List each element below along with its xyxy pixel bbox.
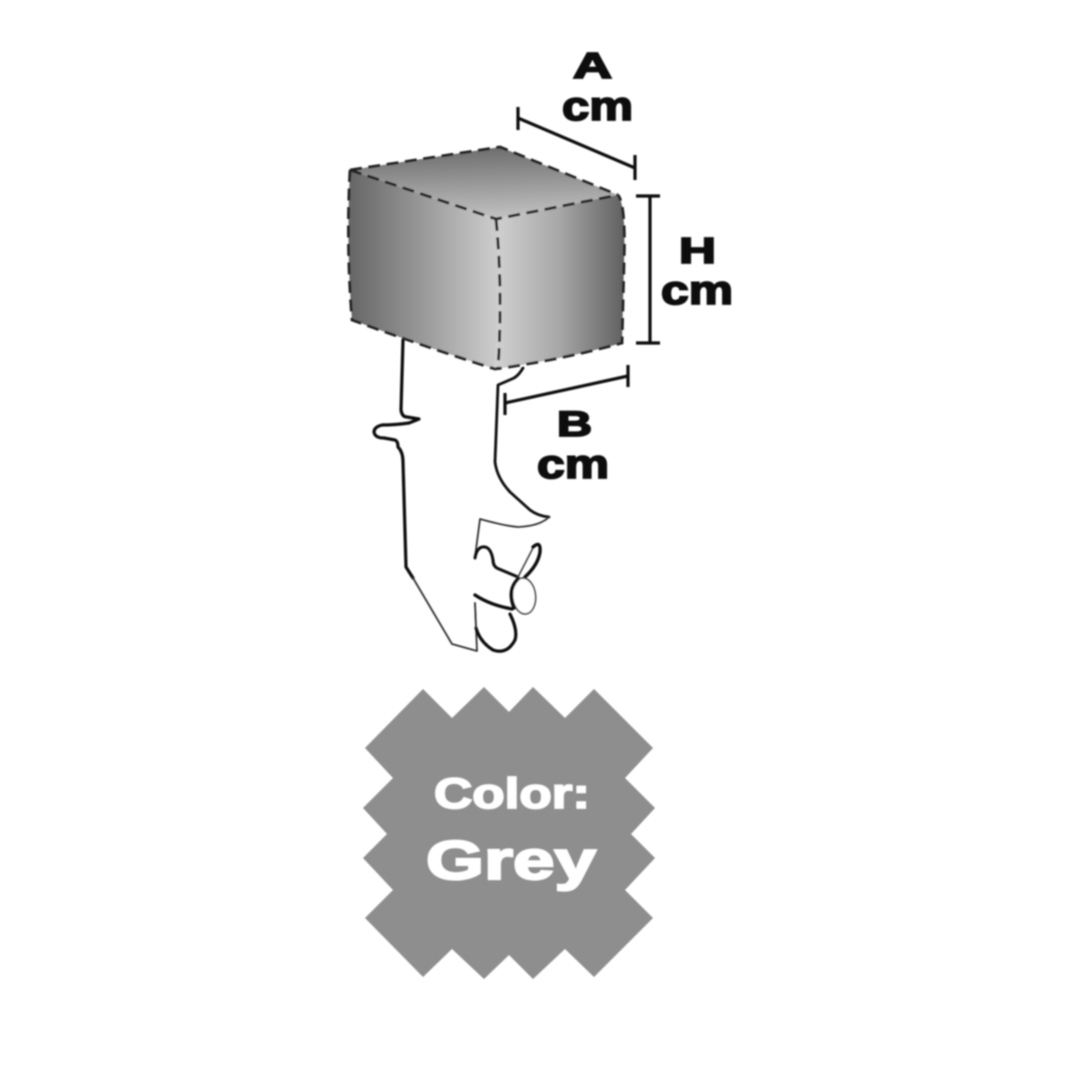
label B cm <box>537 405 609 487</box>
dimension H line <box>636 196 660 343</box>
propeller and hub <box>475 544 540 651</box>
label A cm: A <box>573 45 612 86</box>
left face <box>348 170 501 369</box>
label H cm: H <box>679 230 716 271</box>
label H cm: cm <box>661 267 733 313</box>
dimension A line <box>518 107 635 180</box>
label A cm: cm <box>562 83 633 129</box>
dashed seams <box>348 147 624 369</box>
label A cm <box>562 45 633 129</box>
label H cm <box>661 230 733 313</box>
zigzag swatch shape <box>363 687 655 979</box>
label B cm: B <box>557 405 592 444</box>
top face <box>350 147 618 219</box>
outboard motor illustration <box>348 45 733 979</box>
right face <box>495 195 624 369</box>
engine leg outline <box>374 340 549 651</box>
label B cm: cm <box>537 441 609 487</box>
colour value: Grey <box>426 829 597 891</box>
colour swatch <box>363 687 655 979</box>
dimension B line <box>505 365 628 415</box>
cover box <box>348 147 624 369</box>
colour label: Color: <box>434 770 590 818</box>
